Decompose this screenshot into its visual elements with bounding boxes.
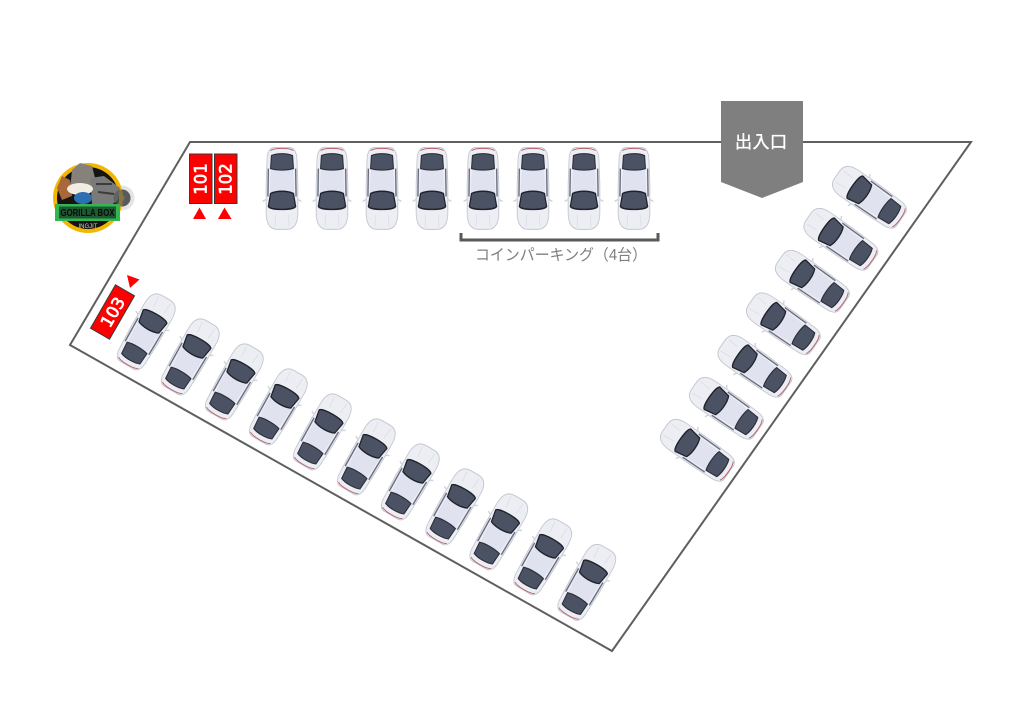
car lower 5 xyxy=(286,388,359,475)
space label 103 xyxy=(90,285,135,339)
car lower 7 xyxy=(374,438,447,525)
car right 1 xyxy=(826,159,912,235)
car right 2 xyxy=(797,201,884,277)
car top 5 xyxy=(464,148,502,229)
logo: Gorilla Box xyxy=(53,163,134,233)
cars: right row xyxy=(654,159,912,488)
car right 7 xyxy=(654,412,740,488)
car top 1 xyxy=(263,148,301,229)
car top 2 xyxy=(313,148,351,229)
car top 8 xyxy=(615,148,653,229)
coin parking label: コインパーキング（4台） xyxy=(475,246,647,264)
car lower 1 xyxy=(110,288,183,375)
car lower 4 xyxy=(242,363,315,450)
space label 101 xyxy=(190,154,212,204)
marker: 101 xyxy=(193,208,206,219)
car right 5 xyxy=(711,328,798,404)
car lower 11 xyxy=(551,539,623,625)
car lower 6 xyxy=(330,413,403,500)
car lower 3 xyxy=(198,338,271,425)
entrance marker: 出入口 xyxy=(735,132,787,152)
car top 7 xyxy=(565,148,603,229)
coin parking bracket xyxy=(461,233,658,240)
parking lot outline xyxy=(70,142,971,651)
logo: Gorilla Box: GORILLA BOX xyxy=(60,208,115,219)
space label 101: 101 xyxy=(192,163,210,195)
space label 102 xyxy=(214,154,237,204)
car right 4 xyxy=(740,285,826,362)
car top 4 xyxy=(413,148,451,229)
car top 3 xyxy=(363,148,401,229)
cars: lower-left row xyxy=(110,288,623,625)
car lower 2 xyxy=(154,313,227,400)
space label 102: 102 xyxy=(216,163,236,195)
car lower 10 xyxy=(507,513,579,600)
coin parking cars: top row xyxy=(263,148,653,229)
marker: 103 xyxy=(127,275,140,288)
car lower 9 xyxy=(463,488,535,575)
car lower 8 xyxy=(419,463,491,550)
entrance marker xyxy=(721,101,803,198)
car right 3 xyxy=(769,243,855,319)
car top 6 xyxy=(514,148,552,229)
car right 6 xyxy=(683,370,769,446)
logo: Gorilla Box: INGJIT xyxy=(78,224,98,230)
marker: 102 xyxy=(218,208,232,219)
space label 103: 103 xyxy=(97,294,129,331)
